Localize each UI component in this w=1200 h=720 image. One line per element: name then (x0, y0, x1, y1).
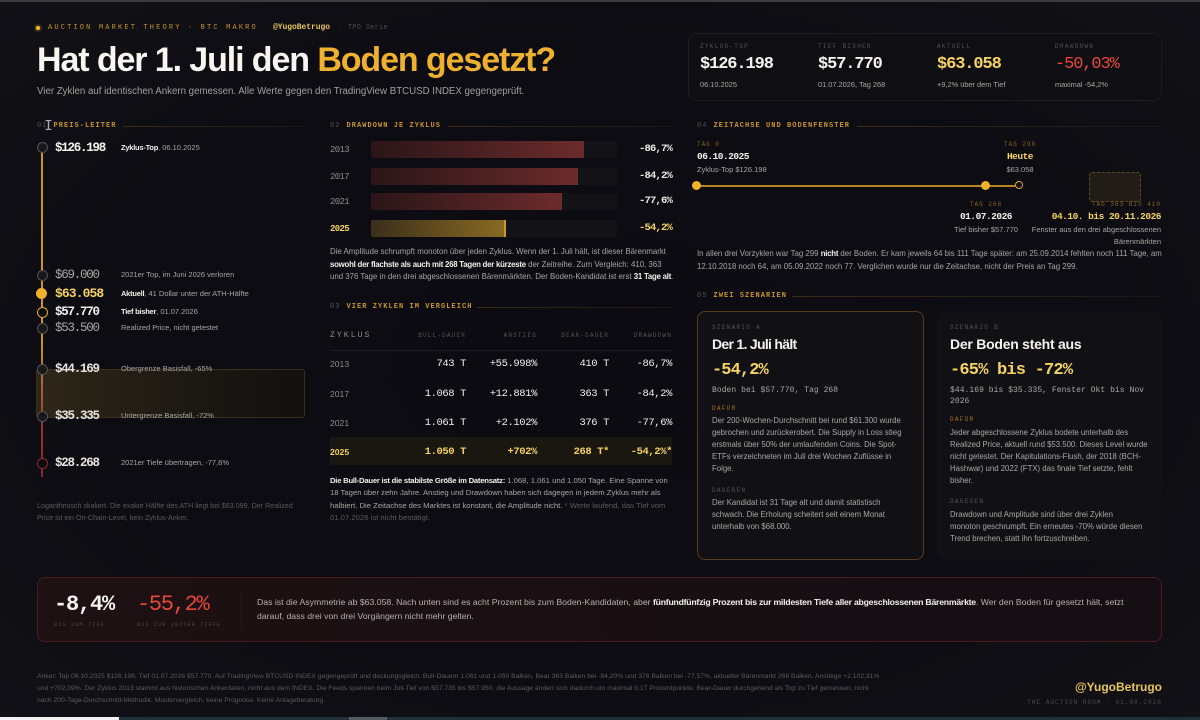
scenario A pro: Der 200-Wochen-Durchschnitt bei rund $61.300 wurde (712, 416, 901, 425)
level: 126.198: Zyklus-Top, 06.10.2025 (121, 143, 200, 152)
row 2017 (330, 388, 672, 400)
scenario B pro: Hashwar) und 2022 (FTX) das finale Tief setzte, fehlt (950, 464, 1132, 473)
KPI: Tief bisher: $57.770 (818, 55, 882, 74)
stat: to 2021 low (137, 592, 222, 630)
level: 28.268: $28.268 (55, 456, 99, 470)
KPI: Tief bisher: 01.07.2026, Tag 268 (818, 80, 885, 89)
bottom window box (1089, 172, 1141, 202)
footer note: nach 200-Tage-Durchschnitt-Methodik. Mustervergleich, keine Prognose. Keine Anlageberatung. (37, 697, 325, 704)
KPI: Tief bisher: TIEF BISHER (818, 43, 872, 50)
bar: 2013 (330, 141, 673, 158)
row 2021: +2.102% (496, 417, 537, 429)
KPI: Drawdown: -50,03% (1055, 55, 1119, 74)
callout text (257, 595, 1124, 623)
table text: 18 Tagen über zehn Jahre. Anstieg und Drawdown haben sich dagegen in jedem Zyklus mehr als (330, 488, 661, 497)
scenario B pro (950, 415, 1155, 490)
level: 28.268 (37, 456, 229, 470)
heading 04: 04 ZEITACHSE UND BODENFENSTER (697, 122, 850, 130)
scenario B pro: nicht getestet. Der Kapitulations-Flush, der 2018 (BCH- (950, 452, 1141, 461)
marker: Bodenfenster: Fenster aus den drei abgeschlossenen (1032, 225, 1161, 234)
level: 69.000: $69.000 (55, 268, 99, 282)
marker: Tag 0: Zyklus-Top $126.198 (697, 165, 767, 174)
stat: to low: -8,4% (54, 592, 114, 617)
KPI: Tief bisher (818, 43, 885, 89)
KPI: Drawdown (1055, 43, 1120, 89)
scenario A contra: DAGEGEN (712, 487, 746, 494)
scenario B contra (950, 497, 1155, 549)
heading 02: 02 DRAWDOWN JE ZYKLUS (330, 122, 441, 130)
table header (330, 329, 672, 351)
footer note (37, 671, 879, 708)
scenario B pro: DAFÜR (950, 416, 975, 423)
KPI: Aktuell: +9,2% über dem Tief (937, 80, 1005, 89)
scenario A pro: gebrochen und zurückerobert. Die Supply in Loss stieg (712, 428, 901, 437)
row 2021 (330, 417, 672, 429)
level: 57.770 low: Tief bisher, 01.07.2026 (121, 307, 198, 316)
scenario B subline (950, 385, 1144, 407)
scenario B contra: DAGEGEN (950, 498, 984, 505)
scenario B pro: Jeder abgeschlossene Zyklus bodete unterhalb des (950, 428, 1128, 437)
marker: Tag 299: $63.058 (1006, 165, 1034, 174)
marker: Bodenfenster: Bärenmärkten (1114, 236, 1161, 246)
point: top (692, 181, 701, 190)
marker: Bodenfenster (1032, 201, 1161, 246)
level: 69.000 (37, 268, 234, 282)
title: Hat der 1. Juli den Boden gesetzt? (37, 41, 555, 79)
row 2025 highlighted: 268 T* (574, 446, 609, 458)
KPI: Zyklus-Top: $126.198 (700, 55, 773, 74)
KPI: Aktuell: $63.058 (937, 55, 1001, 74)
scenario B contra: monoton geschrumpft. Ein erneutes -70% würde diesen (950, 522, 1142, 531)
KPI: Zyklus-Top (700, 43, 774, 89)
timeline text (697, 249, 1162, 270)
level: 57.770 low: $57.770 (55, 305, 99, 319)
level: 57.770 low (37, 305, 198, 319)
table header: BEAR-DAUER (561, 332, 609, 339)
comparison table (330, 331, 672, 465)
bar: 2025: -54,2% (639, 222, 672, 234)
panel: KPI strip (688, 33, 1162, 101)
level: 35.335: Untergrenze Basisfall, -72% (121, 411, 214, 420)
marker: Tag 268 (954, 201, 1018, 234)
table header: ANSTIEG (504, 332, 537, 339)
level: 28.268: 2021er Tiefe übertragen, -77,6% (121, 458, 229, 467)
row 2025 highlighted: -54,2%* (631, 446, 672, 458)
timeline (692, 181, 1023, 190)
footer note: Anker: Top 06.10.2025 $126.198, Tief 01.07.2026 $57.770. Auf TradingView BTCUSD INDEX gegengeprüft und deckungsgleich: Bull-Dauern 1.061 und 1.050 Balken, Bear 363 Balken bei -84,20% und 376 Balken bei -77,57%, aktueller Bärenmarkt 268 Balken. Anstiege +2.102,31% (37, 673, 879, 680)
scenario A pro (712, 404, 912, 479)
row 2013: 743 T (436, 358, 466, 370)
bar: 2021 (330, 193, 673, 210)
level: 44.169 (37, 362, 212, 376)
row 2013: -86,7% (637, 358, 672, 370)
panel: Zeitachse und Bodenfenster (692, 122, 1162, 270)
row 2025 highlighted (330, 437, 672, 465)
eyebrow (34, 23, 388, 32)
row 2021: 2021 (330, 418, 349, 428)
scenario band (36, 369, 305, 418)
KPI: Aktuell (937, 43, 1006, 89)
scenario A contra: unterhalb von $68.000. (712, 522, 792, 531)
marker: Tag 268: TAG 268 (970, 201, 1002, 208)
marker: Tag 0: 06.10.2025 (697, 151, 749, 162)
scenario A pro: Folge. (712, 464, 734, 473)
footer signature: @YugoBetrugo (1075, 680, 1162, 694)
ladder line (41, 147, 43, 477)
ladder note (37, 502, 293, 522)
table text (330, 476, 668, 522)
subtitle: Vier Zyklen auf identischen Ankern gemessen. Alle Werte gegen den TradingView BTCUSD INDEX gegengeprüft. (37, 86, 524, 97)
level: 53.500: $53.500 (55, 321, 99, 335)
table header: BULL-DAUER (418, 332, 466, 339)
level: 126.198 (37, 141, 200, 155)
timeline axis (697, 185, 1015, 187)
scenario A value: -54,2% (712, 361, 768, 380)
stat: to 2021 low: -55,2% (137, 592, 208, 617)
drawdown text: Die Amplitude schrumpft monoton über jeden Zyklus. Wenn der 1. Juli hält, ist dieser Bärenmarkt (330, 247, 666, 256)
row 2025 highlighted: 2025 (330, 447, 349, 457)
scenario B subline: 2026 (950, 397, 969, 406)
stat: to low (54, 592, 114, 630)
row 2025 highlighted: 1.050 T (425, 446, 466, 458)
row 2021: -77,6% (637, 417, 672, 429)
scenario A title: Der 1. Juli hält (712, 336, 796, 352)
scenario A contra (712, 486, 912, 538)
KPI: Drawdown: DRAWDOWN (1055, 43, 1094, 50)
level: 63.058 current: Aktuell, 41 Dollar unter der ATH-Hälfte (121, 289, 249, 298)
stat: to 2021 low: BIS ZUR 2021ER TIEFE (137, 621, 221, 628)
scenario A subline: Boden bei $57.770, Tag 268 (712, 386, 838, 395)
bar: 2021: -77,6% (639, 195, 672, 207)
table header: DRAWDOWN (634, 332, 672, 339)
row 2013 (330, 358, 672, 370)
level: 35.335: $35.335 (55, 409, 99, 423)
point: low (981, 181, 990, 190)
marker: Tag 299: TAG 299 (1004, 141, 1036, 148)
panel: Szenario B: SZENARIO B (950, 324, 999, 331)
handle: @YugoBetrugo (273, 23, 330, 32)
scenario B pro: bisher. (950, 476, 973, 485)
footer signature: THE AUCTION ROOM · 01.08.2026 (1027, 699, 1162, 706)
heading 01: 01 PREIS-LEITER (37, 122, 117, 130)
row 2017: +12.881% (490, 388, 537, 400)
table text: Die Bull-Dauer ist die stabilste Größe im Datensatz: 1.068, 1.061 und 1.050 Tage. Eine Spanne von (330, 476, 668, 485)
icon: text cursor: I (44, 118, 53, 135)
marker: Bodenfenster: TAG 363 BIS 410 (1092, 201, 1161, 208)
scenario B pro: Realized Price, aktuell rund $53.500. Dieses Level wurde (950, 440, 1148, 449)
scenario B contra: Trend brechen, statt ihn fortzuschreiben. (950, 534, 1090, 543)
scenario A pro: DAFÜR (712, 405, 737, 412)
scenario A pro: ETFs verzeichneten im Juli drei Wochen Zuflüsse in (712, 452, 891, 461)
level: 44.169: $44.169 (55, 362, 99, 376)
level: 35.335 (37, 409, 214, 423)
ladder note: Price ist ein On-Chain-Level, kein Zyklus-Anker. (37, 514, 188, 522)
series label: · TPO Serie (339, 24, 388, 32)
marker: Tag 268: 01.07.2026 (960, 211, 1012, 222)
callout text: darauf, dass drei von drei Vorgängern nicht mehr gelten. (257, 611, 474, 621)
bar: 2025 (330, 220, 673, 237)
marker: Tag 299: Heute (1007, 151, 1033, 162)
marker: Tag 0: TAG 0 (697, 141, 720, 148)
drawdown text: und 376 Tage in den drei abgeschlossenen Bärenmärkten. Der Boden-Kandidat ist erst 31 Tage alt. (330, 272, 673, 281)
KPI: Drawdown: maximal -54,2% (1055, 80, 1108, 89)
row 2017: 2017 (330, 389, 349, 399)
scenario A contra: schwach. Die Erholung scheitert seit einem Monat (712, 510, 885, 519)
panel: Szenario A (697, 311, 924, 560)
row 2017: 363 T (579, 388, 609, 400)
panel: Vier Zyklen im Vergleich (330, 303, 672, 522)
level: 63.058 current: $63.058 (55, 286, 103, 301)
icon: gold dot (36, 26, 40, 30)
bar: 2013: 2013 (330, 145, 349, 155)
table text: halbiert. Die Zeitachse des Marktes ist konstant, die Amplitude nicht. * Werte laufend, das Tief vom (330, 501, 665, 510)
footer note: und +702,09%. Der Zyklus 2013 stammt aus historischen Ankerdaten, nicht aus dem INDEX. Die Feeds spannen beim Juli-Tief von $57.735 bis $57.950, die Aussage ändert sich dadurch um maximal 0,17 Prozentpunkte. Bear-Dauer durchgehend als Top zu Tief gemessen, nicht (37, 685, 869, 692)
heading 03: 03 VIER ZYKLEN IM VERGLEICH (330, 303, 473, 311)
level: 126.198: $126.198 (55, 141, 105, 155)
KPI: Zyklus-Top: ZYKLUS-TOP (700, 43, 749, 50)
bar: 2017 (330, 168, 673, 185)
bar: 2013: -86,7% (639, 143, 672, 155)
footer signature (1020, 679, 1162, 709)
row 2021: 1.061 T (425, 417, 466, 429)
panel: Szenario A: SZENARIO A (712, 324, 761, 331)
marker: Tag 0 (697, 141, 767, 174)
scenario B value: -65% bis -72% (950, 361, 1072, 380)
bar: 2021: 2021 (330, 197, 349, 207)
level: 63.058 current (36, 286, 249, 301)
top edge strip (0, 0, 1200, 2)
panel: Drawdown je Zyklus (330, 122, 673, 281)
scenario A contra: Der Kandidat ist 31 Tage alt und damit statistisch (712, 498, 880, 507)
scenario B contra: Drawdown und Amplitude sind über drei Zyklen (950, 510, 1113, 519)
marker: Tag 299 (1004, 141, 1036, 174)
callout text: Das ist die Asymmetrie ab $63.058. Nach unten sind es acht Prozent bis zum Boden-Kandidaten, aber fünfundfünfzig Prozent bis zur mildesten Tiefe aller abgeschlossenen Bärenmärkte. Wer den Boden für gesetzt hält, setzt (257, 597, 1124, 607)
row 2013: 410 T (579, 358, 609, 370)
KPI: Aktuell: AKTUELL (937, 43, 971, 50)
bar: 2017: 2017 (330, 172, 349, 182)
level: 44.169: Obergrenze Basisfall, -65% (121, 364, 212, 373)
timeline text: In allen drei Vorzyklen war Tag 299 nicht der Boden. Er kam jeweils 64 bis 111 Tage später: am 25.09.2014 fehlten noch 111 Tage, am (697, 249, 1162, 258)
table header: ZYKLUS (330, 331, 371, 340)
level: 53.500: Realized Price, nicht getestet (121, 323, 218, 332)
row 2017: 1.068 T (425, 388, 466, 400)
heading 05: 05 ZWEI SZENARIEN (697, 292, 787, 300)
panel: asymmetry callout (37, 577, 1162, 642)
marker: Tag 268: Tief bisher $57.770 (954, 225, 1018, 234)
timeline text: 12.10.2018 noch 64, am 05.09.2022 noch 77. Verglichen wurde nur die Zeitachse, nicht der Preis an Tag 299. (697, 262, 1078, 270)
row 2013: +55.998% (490, 358, 537, 370)
marker: Bodenfenster: 04.10. bis 20.11.2026 (1052, 211, 1161, 222)
table text: 01.07.2026 ist nicht bestätigt. (330, 513, 430, 522)
row 2013: 2013 (330, 359, 349, 369)
row 2021: 376 T (579, 417, 609, 429)
row 2025 highlighted: +702% (507, 446, 537, 458)
bar: 2017: -84,2% (639, 170, 672, 182)
level: 53.500 (37, 321, 218, 335)
scenario B subline: $44.169 bis $35.335, Fenster Okt bis Nov (950, 386, 1144, 395)
panel: Preis-Leiter (36, 118, 305, 522)
scenario B title: Der Boden steht aus (950, 336, 1081, 352)
stat: to low: BIS ZUM TIEF (54, 621, 105, 628)
level: 69.000: 2021er Top, im Juni 2026 verloren (121, 270, 234, 279)
point: today (1015, 181, 1023, 189)
bottom edge strip (0, 717, 1200, 720)
scenario A pro: erstmals über 50% der umlaufenden Coins. Die Spot- (712, 440, 897, 449)
bar: 2025: 2025 (330, 224, 349, 234)
panel: Szenario B (937, 311, 1162, 559)
bar chart (330, 141, 673, 237)
row 2017: -84,2% (637, 388, 672, 400)
drawdown text (330, 247, 673, 281)
ladder note: Logarithmisch skaliert. Die exakte Hälfte des ATH liegt bei $63.099. Der Realized (37, 502, 293, 510)
drawdown text: sowohl der flachste als auch mit 268 Tagen der kürzeste der Zeitreihe. Zum Vergleich: 410, 363 (330, 260, 662, 268)
KPI: Zyklus-Top: 06.10.2025 (700, 80, 737, 89)
eyebrow text: AUCTION MARKET THEORY · BTC MAKRO (48, 24, 258, 32)
